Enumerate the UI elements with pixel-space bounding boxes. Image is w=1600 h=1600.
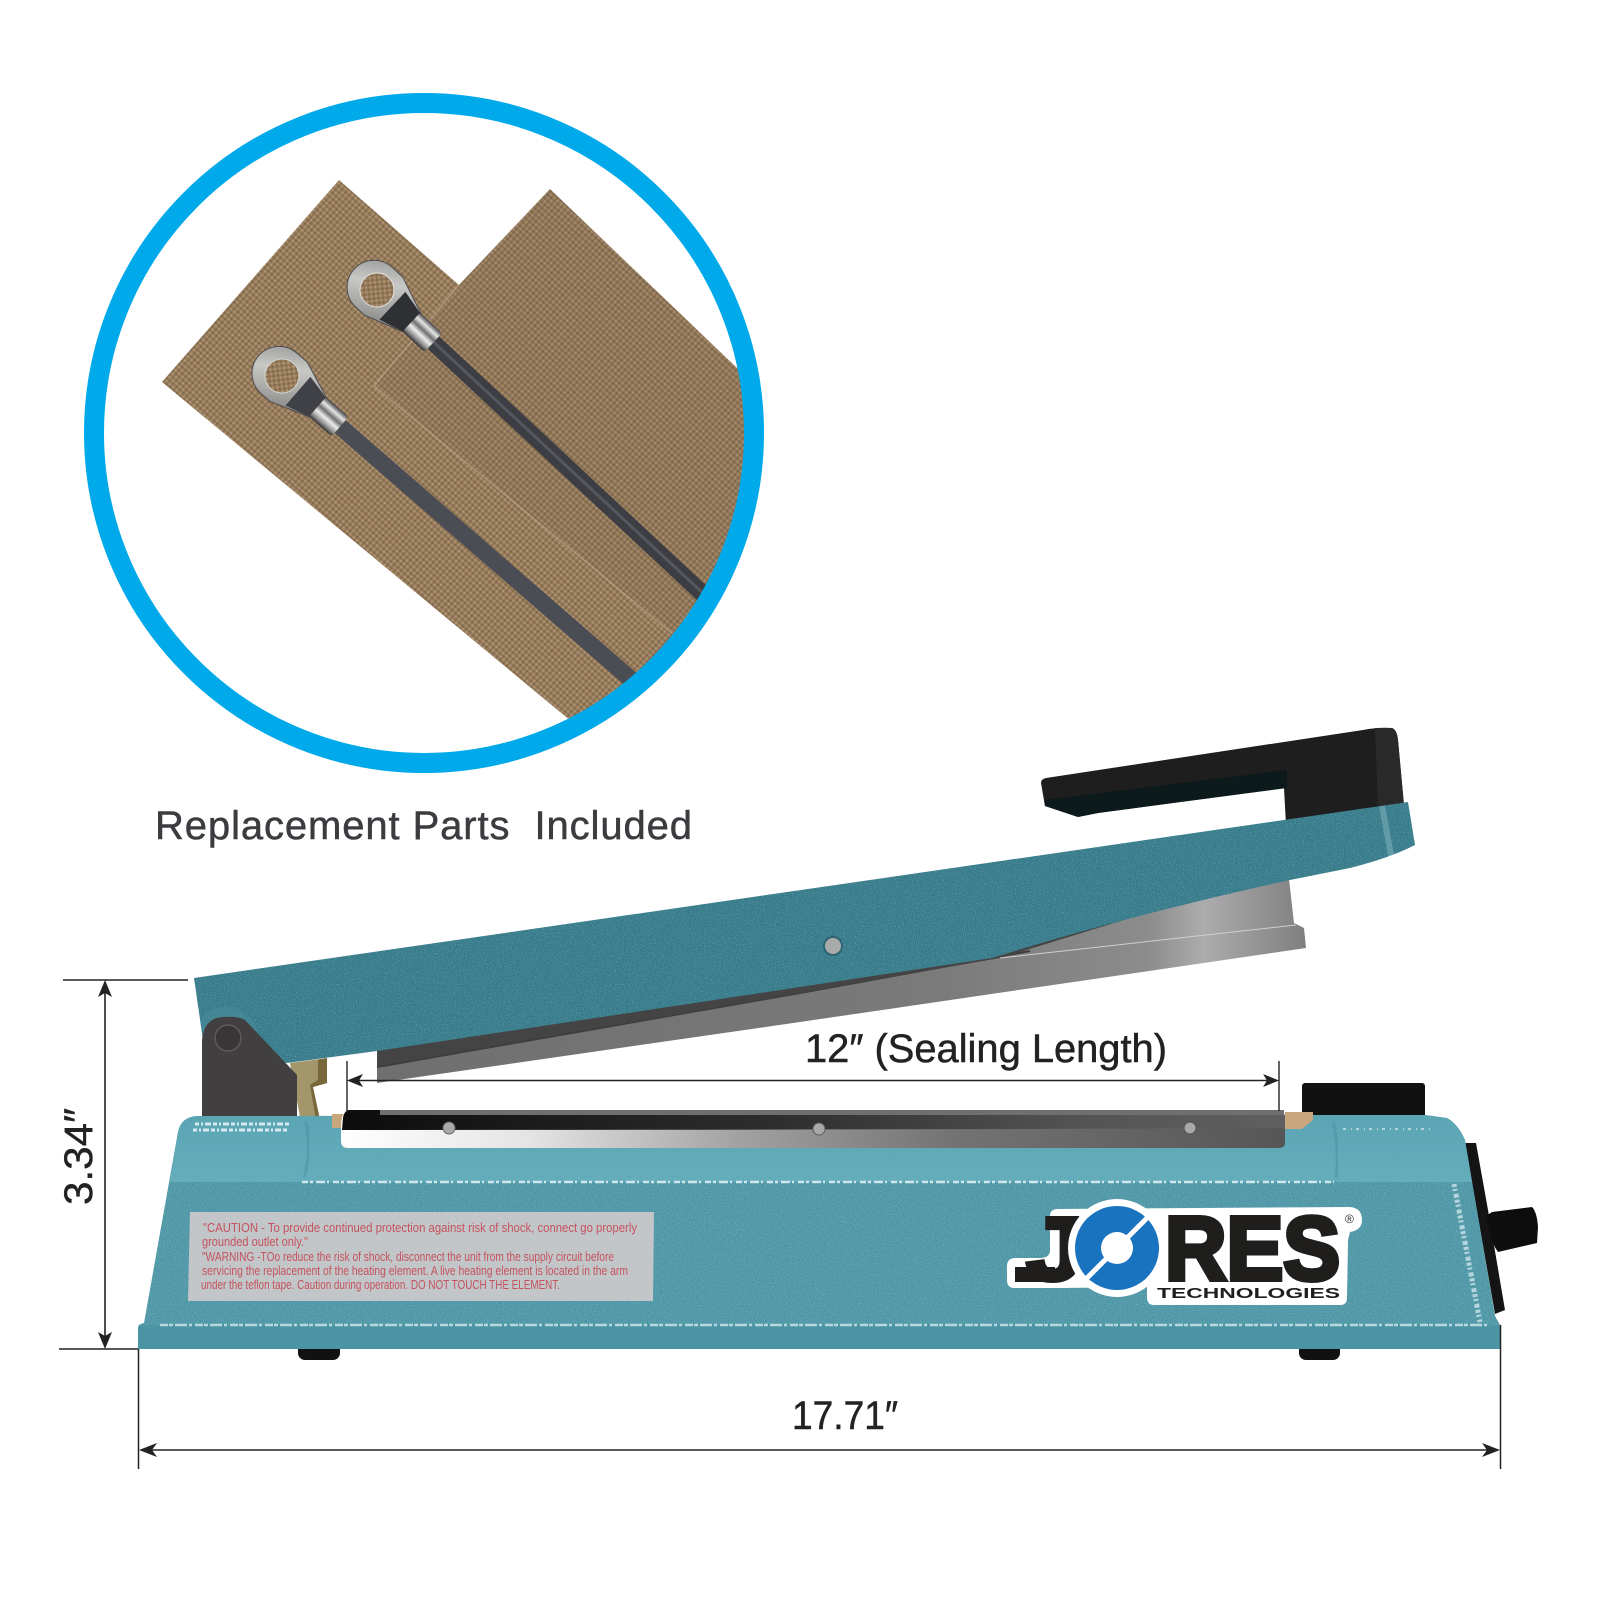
black top block	[1302, 1083, 1425, 1119]
machine: impulse sealer	[138, 728, 1538, 1360]
pivot screw	[215, 1025, 241, 1051]
dimension: sealing length 12 inches: 12″ (Sealing Length)	[805, 1027, 1167, 1071]
teal arm	[193, 802, 1415, 1073]
dimension: height 3.34 inches: 3.34″	[57, 1108, 101, 1205]
base body	[138, 1115, 1500, 1349]
pivot halo	[200, 1007, 258, 1036]
bar screws	[443, 1122, 455, 1134]
heading: replacement parts included: Replacement Parts Included	[155, 804, 692, 848]
pivot bracket	[202, 1017, 297, 1116]
warning label	[188, 1212, 654, 1301]
warning label: under the teflon tape. Caution during operation. DO NOT TOUCH THE ELEMENT.	[201, 1278, 560, 1292]
dimension: height 3.34 inches	[57, 980, 188, 1349]
brass hinge	[290, 1058, 327, 1120]
logo tagline: TECHNOLOGIES	[1157, 1286, 1341, 1302]
knurled end: right	[1285, 1112, 1313, 1129]
dimension: overall width 17.71 inches	[138, 1325, 1500, 1469]
panel: replacement parts circle	[84, 93, 764, 773]
black handle	[1041, 728, 1404, 825]
logo: Jores Technologies	[1007, 1199, 1362, 1305]
warning label: servicing the replacement of the heating element. A live heating element is located in the arm	[202, 1264, 628, 1278]
logo registered mark: ®	[1345, 1212, 1354, 1226]
highlight sparkle lines	[302, 1181, 1334, 1183]
foot: right	[1299, 1342, 1340, 1360]
control panel side plate	[1465, 1143, 1505, 1314]
warning label: "CAUTION - To provide continued protection against risk of shock, connect go properly	[203, 1221, 638, 1235]
wordmark letter J: J	[1026, 1200, 1084, 1300]
sealing bar	[341, 1110, 1285, 1148]
metal upper jaw	[377, 870, 1306, 1083]
jaw dark groove	[377, 951, 1030, 1067]
upper lighter step	[170, 1115, 1472, 1182]
foot: left	[298, 1342, 340, 1360]
stitch line	[374, 285, 680, 640]
teflon tape sheet	[162, 180, 744, 719]
heating wire: upper	[346, 260, 706, 600]
arm rivet	[824, 937, 842, 955]
dimension: sealing length 12 inches	[347, 1027, 1279, 1111]
jaw shadow under arm	[377, 915, 1140, 1066]
heating wire: lower	[252, 346, 636, 684]
warning label: grounded outlet only."	[202, 1235, 308, 1249]
blue ring	[94, 103, 754, 763]
base lip	[138, 1325, 1500, 1349]
logo white backing	[1007, 1207, 1362, 1305]
shaded second sheet	[378, 191, 744, 632]
J hook bar	[1015, 1267, 1055, 1282]
logo disc	[1068, 1199, 1166, 1297]
knurled end: left	[332, 1114, 345, 1128]
arm end highlight	[1382, 806, 1392, 860]
dimension: overall width 17.71 inches: 17.71″	[792, 1394, 898, 1438]
wordmark letters RES: RES	[1165, 1200, 1340, 1300]
warning label: "WARNING -TOo reduce the risk of shock, disconnect the unit from the supply circuit before	[202, 1250, 614, 1264]
timer knob	[1486, 1207, 1538, 1252]
photo: PTFE tape and heating wires	[162, 180, 744, 719]
